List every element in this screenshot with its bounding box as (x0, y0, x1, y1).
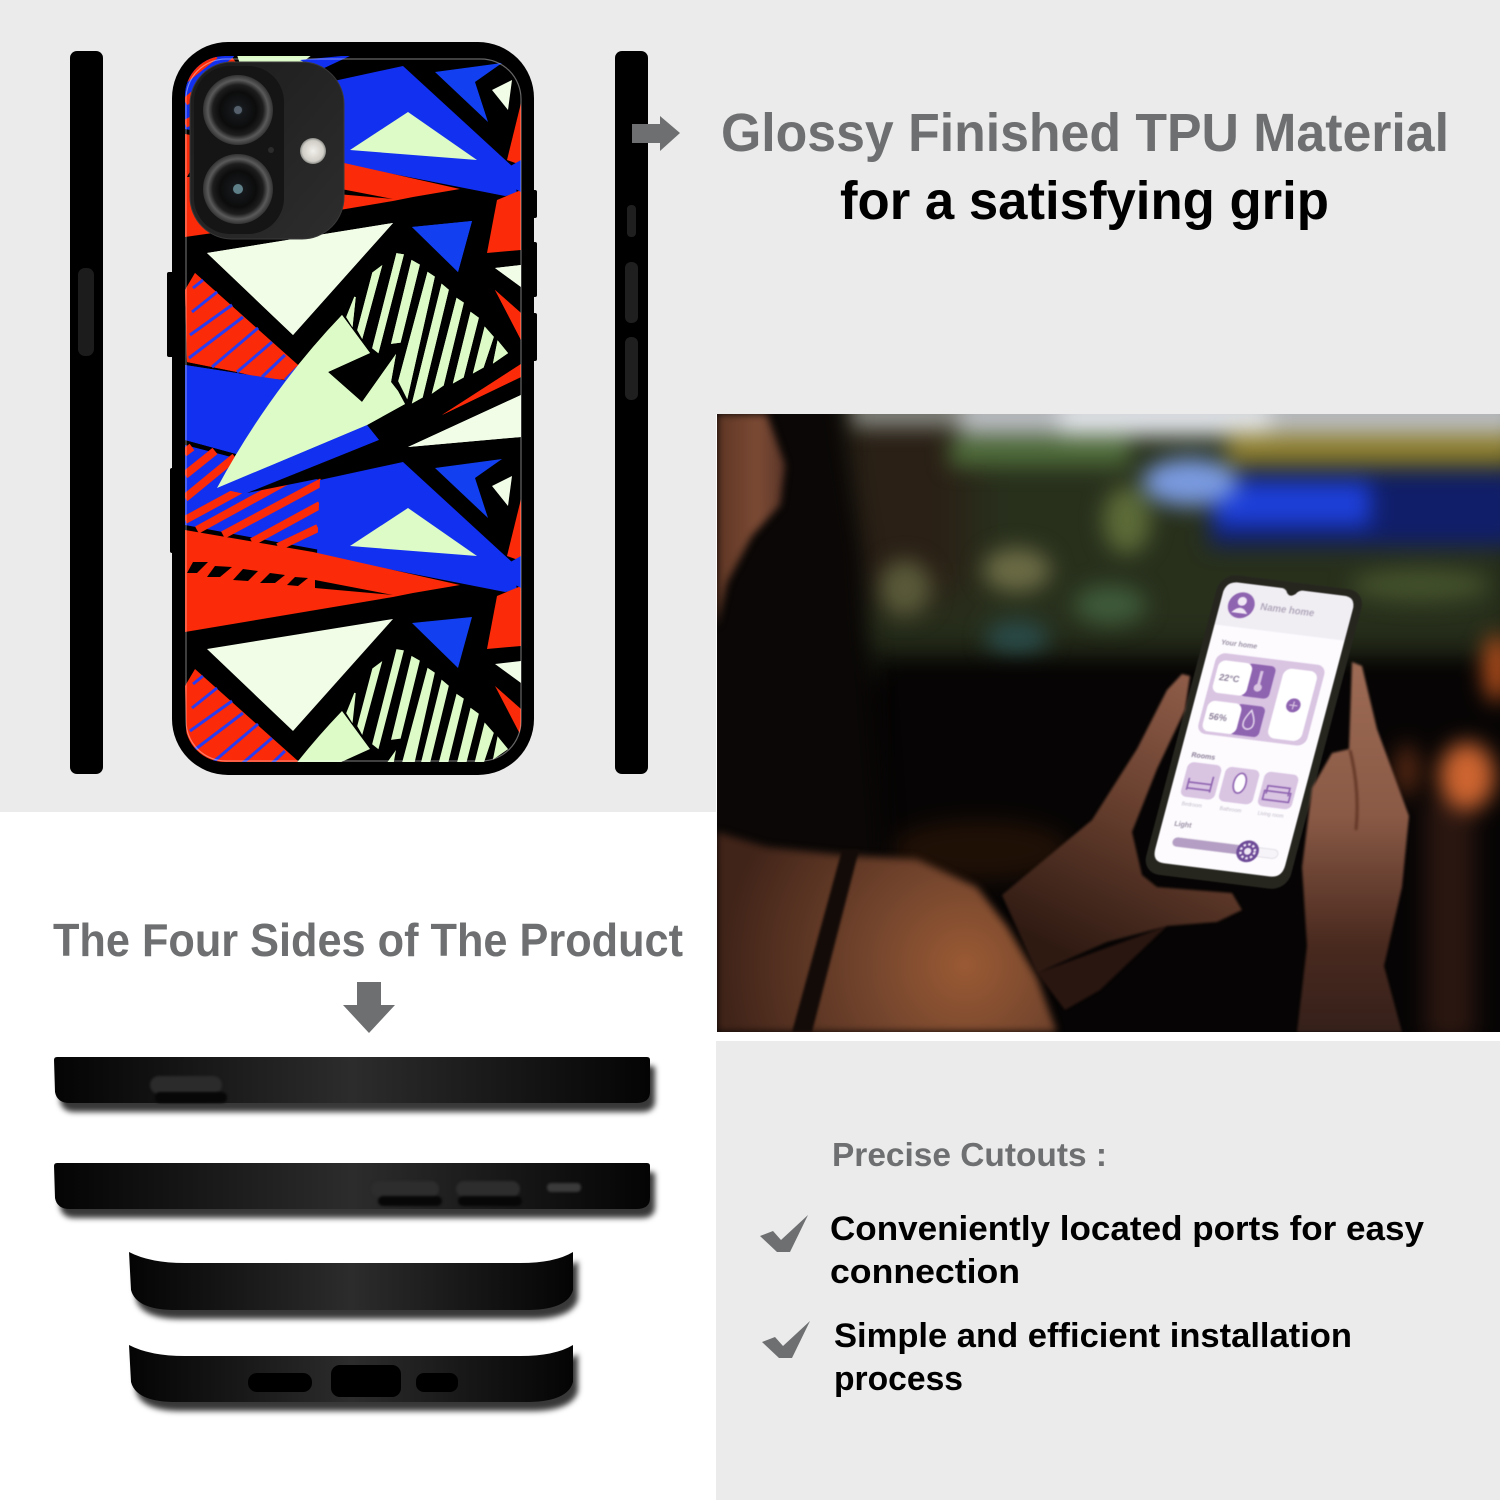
case body (172, 42, 534, 775)
rooms: Bathroom (1219, 806, 1242, 815)
side buttons (167, 190, 537, 553)
icon: check mark 1 (760, 1215, 808, 1252)
arrow down (343, 982, 395, 1033)
bullet: installation: process (834, 1360, 963, 1398)
flash (300, 138, 326, 164)
camera module (190, 62, 344, 239)
dress strap (792, 850, 859, 1032)
lower lens (203, 154, 273, 224)
phone being held (1142, 573, 1366, 891)
rooms (1180, 752, 1299, 818)
bullet: ports: connection (830, 1253, 1020, 1291)
shoulder (717, 832, 1057, 1032)
bullet: ports (830, 1210, 1424, 1291)
app header text: Name home (1259, 602, 1316, 619)
bullet: installation: Simple and efficient installation (834, 1317, 1352, 1355)
rooms: Living room (1257, 811, 1284, 820)
heading: four sides: The Four Sides of The Product (53, 914, 683, 966)
phone body (1142, 573, 1366, 891)
upper lens (203, 75, 273, 145)
heading: glossy material: for a satisfying grip (840, 171, 1329, 231)
home controls panel: 56% (1208, 711, 1228, 723)
icon: check mark 2 (762, 1321, 810, 1358)
bullet: ports: Conveniently located ports for easy (830, 1210, 1424, 1248)
glossy edge highlight (186, 59, 521, 761)
arrow pointing to heading (632, 116, 680, 151)
phone case back (167, 42, 537, 775)
rooms: Rooms (1190, 751, 1216, 762)
left hand (1002, 674, 1242, 1010)
heading: glossy material (721, 103, 1449, 231)
hair and head (717, 414, 876, 670)
heading: precise cutouts: Precise Cutouts : (832, 1136, 1107, 1173)
home controls panel: 22°C (1218, 672, 1241, 684)
light slider: Light (1173, 820, 1193, 830)
left side view of case (70, 51, 103, 774)
home controls panel (1196, 652, 1327, 747)
case artwork (185, 56, 521, 762)
blurred background scenery (830, 380, 1500, 1044)
side strip: top edge (129, 1252, 573, 1310)
right side view of case (615, 51, 648, 774)
phone screen (1152, 581, 1356, 878)
screen header (1215, 581, 1356, 641)
photo: woman holding phone (717, 414, 1500, 1032)
mic dot (268, 147, 274, 153)
side strip: bottom edge with ports (129, 1345, 573, 1402)
avatar (1227, 592, 1256, 619)
bullet: installation (834, 1317, 1352, 1398)
side strip: left edge (54, 1057, 650, 1103)
side strip: right edge (54, 1163, 650, 1209)
phone being held: Your home (1220, 639, 1258, 651)
right hand (1297, 662, 1409, 1032)
light slider (1172, 820, 1278, 863)
heading: glossy material: Glossy Finished TPU Material (721, 103, 1449, 163)
rooms: Bedroom (1181, 801, 1202, 810)
